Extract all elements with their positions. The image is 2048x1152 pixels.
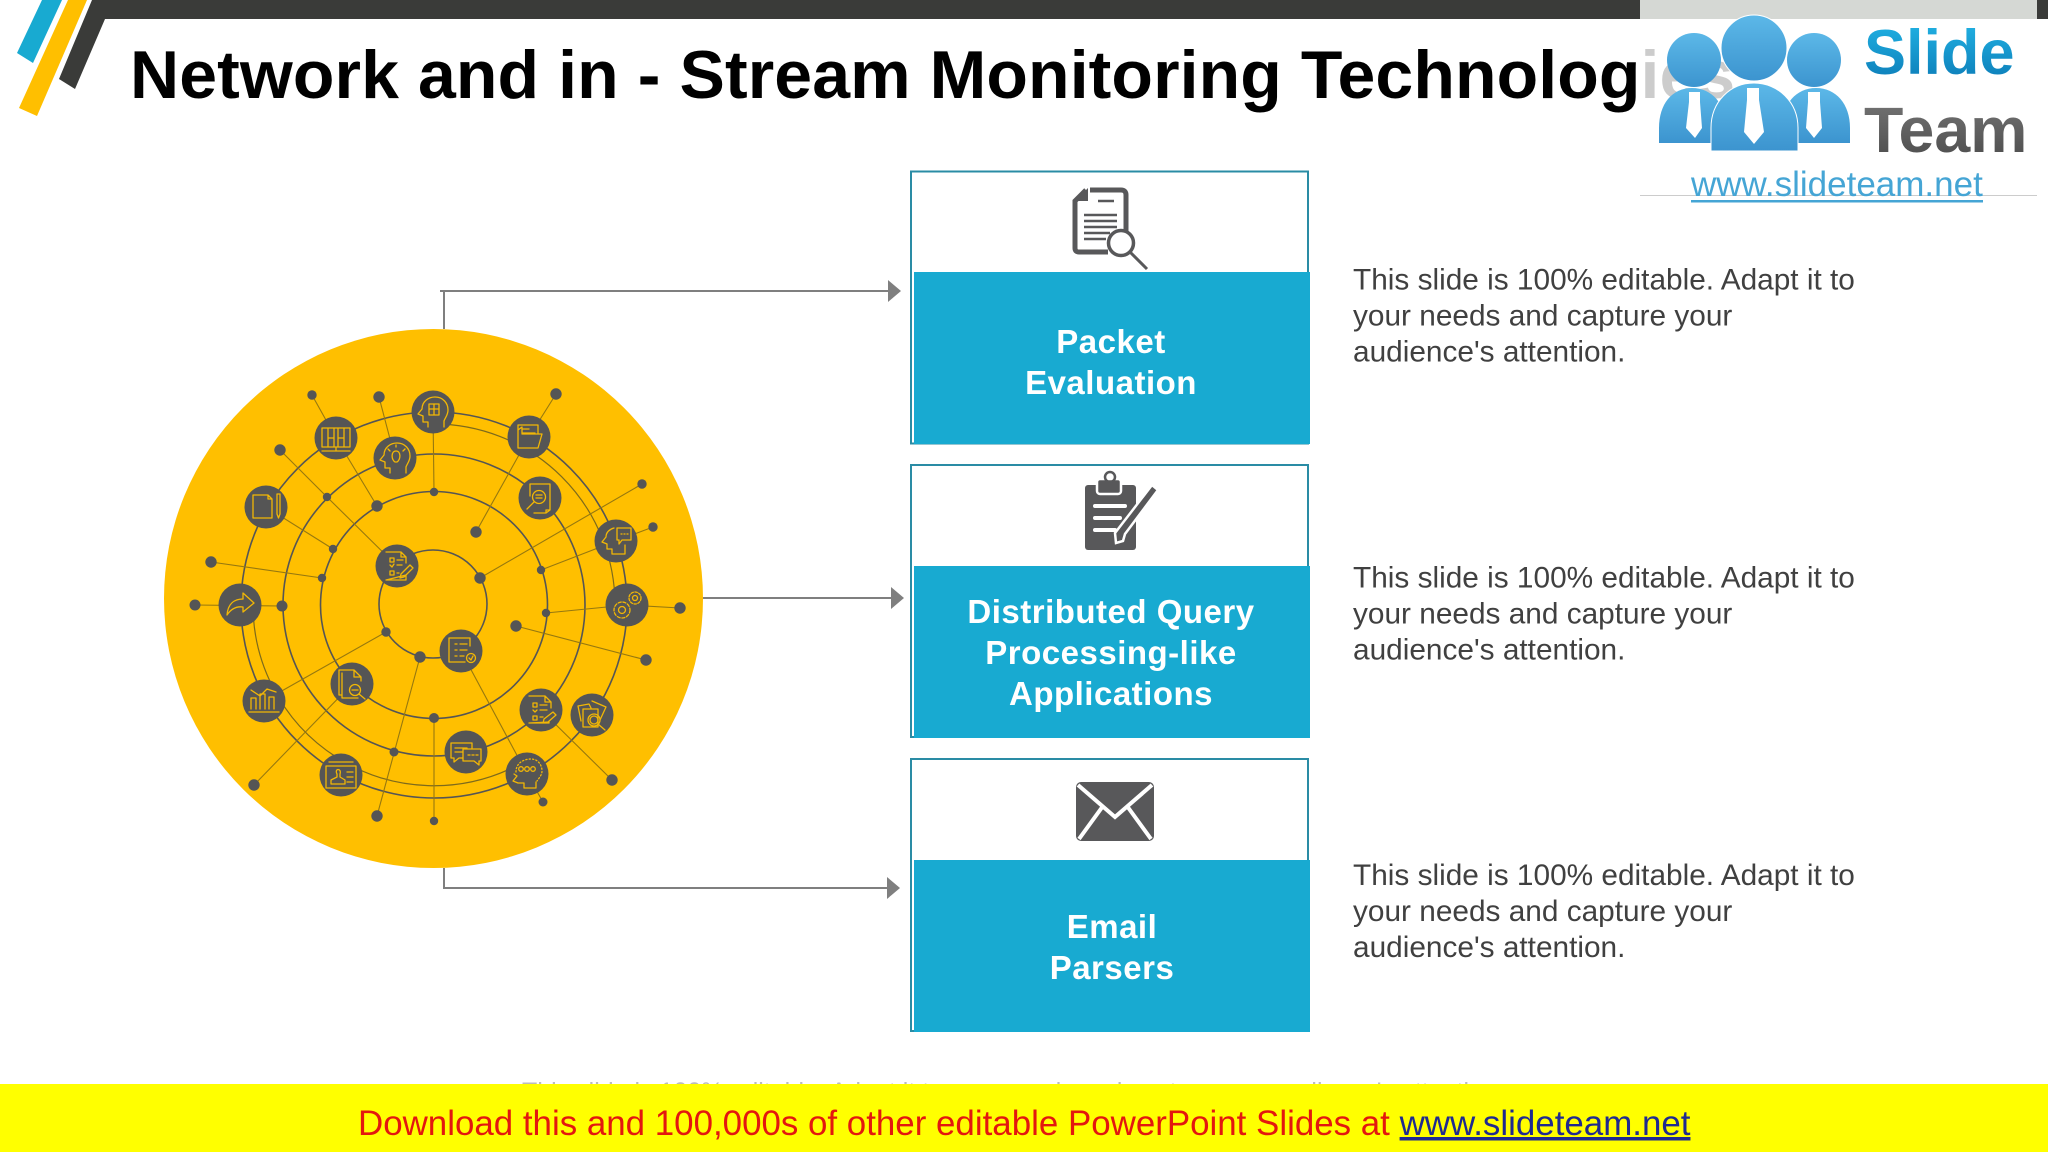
icon: document with magnifier: [1075, 188, 1147, 269]
panel: packet evaluation: [911, 172, 1310, 444]
panel: packet evaluation: Evaluation: [1025, 364, 1197, 401]
description: top: This slide is 100% editable. Adapt it to: [1353, 264, 1855, 296]
yellow disc: [164, 329, 703, 868]
icon: head with dots: [506, 752, 548, 796]
icon: papers with magnifier: [570, 694, 614, 736]
network circle diagram: [164, 329, 703, 868]
logo: www.slideteam.net: [1690, 165, 1983, 204]
clipped footnote behind banner: This slide is 100% editable. Adapt it to your needs and capture your audience's attention.: [522, 1078, 1504, 1106]
spokes: [195, 394, 680, 821]
icon: gears: [606, 584, 648, 626]
connector arrow: bottom: [444, 868, 900, 899]
description: bottom: This slide is 100% editable. Adapt it to: [1353, 859, 1855, 892]
icon: speech bubbles: [444, 730, 488, 774]
description: middle: your needs and capture your: [1353, 598, 1732, 630]
panel: email parsers: [911, 759, 1310, 1032]
description: top: audience's attention.: [1353, 336, 1625, 368]
label: Distributed Query: [967, 593, 1255, 630]
icon: clipboard with pen: [1085, 472, 1158, 550]
description: middle: audience's attention.: [1353, 634, 1625, 666]
icon: document and pen: [244, 486, 288, 528]
description: bottom: your needs and capture your: [1353, 895, 1732, 928]
bottom banner: Download this and 100,000s of other editable PowerPoint Slides at www.slideteam.net: [358, 1104, 1691, 1143]
connector arrow: middle: [703, 587, 904, 609]
icon: checklist with pencil: [376, 544, 418, 588]
icon: document search: [518, 476, 562, 520]
description: top: your needs and capture your: [1353, 300, 1732, 332]
panel: distributed query: Processing-like: [985, 634, 1237, 671]
small dots: [190, 388, 686, 825]
label: Packet: [1056, 323, 1166, 360]
icon: checklist with tick: [440, 630, 482, 672]
icon: lightbulb head: [374, 436, 416, 480]
panel: distributed query: [911, 465, 1310, 738]
logo: [1640, 0, 2037, 204]
header bar and corner stripes: [17, 0, 2048, 116]
rings: [241, 412, 627, 798]
icon: document with magnifier: [330, 662, 374, 706]
icon: share arrow: [218, 584, 262, 626]
icon: folder: [508, 416, 550, 458]
icon: table: [314, 416, 358, 460]
icon: head with puzzle: [412, 390, 454, 434]
icon: thinking head with speech bubble: [594, 520, 638, 562]
description: middle: This slide is 100% editable. Adapt it to: [1353, 562, 1855, 594]
panel: email parsers: Parsers: [1050, 949, 1174, 986]
description: bottom: audience's attention.: [1353, 931, 1625, 964]
icon: bar chart: [242, 680, 286, 722]
icon: id card: [320, 754, 362, 796]
title: Network and in - Stream Monitoring Technologies: [130, 37, 1735, 113]
bottom banner: [0, 1084, 2048, 1152]
panel: distributed query: Applications: [1009, 675, 1213, 712]
label: Email: [1067, 908, 1157, 945]
connector arrow: top: [440, 280, 901, 329]
logo: Team: [1864, 94, 2027, 166]
icon: envelope: [1076, 782, 1154, 841]
logo: Slide: [1864, 18, 2015, 88]
icon: document checklist pencil: [520, 688, 562, 732]
